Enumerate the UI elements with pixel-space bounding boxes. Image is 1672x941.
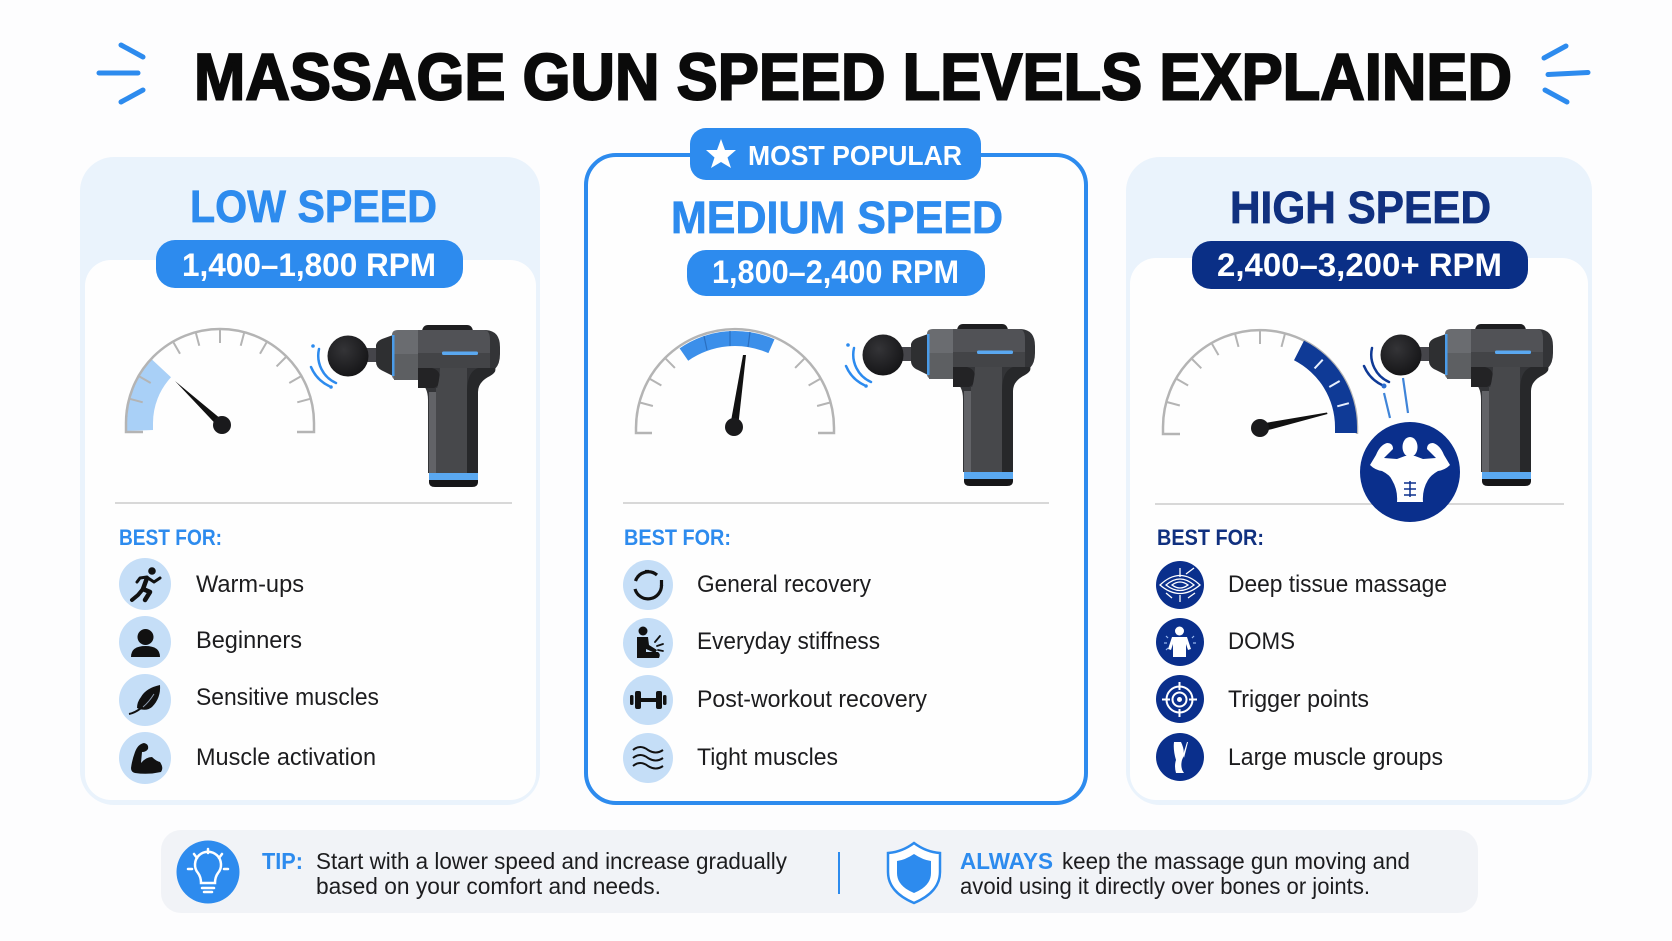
item: sensitive muscles: Sensitive muscles	[196, 684, 379, 711]
item: post-workout recovery	[623, 675, 927, 725]
rpm pill: medium: 1,800–2,400 RPM	[712, 254, 959, 290]
rpm pill: low: 1,400–1,800 RPM	[182, 247, 436, 283]
icon: muscle badge	[1360, 422, 1460, 522]
gauge: medium	[636, 329, 834, 436]
massage gun: medium	[846, 324, 1035, 486]
item: large muscle groups: Large muscle groups	[1228, 744, 1443, 771]
item: muscle activation	[119, 732, 376, 784]
label: best for medium: BEST FOR:	[624, 525, 731, 550]
label: best for high: BEST FOR:	[1157, 525, 1264, 550]
item: deep tissue massage: Deep tissue massage	[1228, 571, 1447, 598]
panel: medium speed	[586, 128, 1086, 803]
tip text	[262, 848, 787, 899]
badge: most popular: MOST POPULAR	[748, 140, 962, 171]
rpm pill: high: 2,400–3,200+ RPM	[1217, 247, 1502, 283]
heading: medium speed: MEDIUM SPEED	[671, 192, 1003, 243]
item: trigger points: Trigger points	[1228, 686, 1369, 713]
gauge: high	[1163, 330, 1357, 437]
item: beginners: Beginners	[196, 627, 302, 654]
item: doms	[1156, 618, 1295, 666]
badge: most popular	[690, 128, 981, 180]
heading: high speed: HIGH SPEED	[1230, 182, 1491, 233]
item: beginners	[119, 616, 302, 668]
title: MASSAGE GUN SPEED LEVELS EXPLAINED	[194, 40, 1512, 114]
item: general recovery	[623, 560, 871, 610]
panel: high speed	[1126, 157, 1592, 805]
arrow: impact lines	[1384, 378, 1408, 418]
label: best for low: BEST FOR:	[119, 525, 222, 550]
icon: left sparks	[99, 45, 143, 102]
rpm pill: low	[156, 240, 463, 288]
callout bar: tips	[161, 830, 1478, 913]
item: warm-ups	[119, 558, 304, 610]
item: warm-ups: Warm-ups	[196, 571, 304, 598]
item: everyday stiffness	[623, 618, 880, 668]
icon: shield	[888, 843, 940, 903]
item: deep tissue massage	[1156, 561, 1447, 609]
item: everyday stiffness: Everyday stiffness	[697, 628, 880, 655]
always text: keep the massage gun moving and	[1062, 848, 1410, 874]
item: muscle activation: Muscle activation	[196, 744, 376, 771]
item: large muscle groups	[1156, 733, 1443, 781]
tip text: TIP:	[262, 848, 303, 874]
icon: right sparks	[1544, 46, 1588, 102]
massage gun: low	[311, 325, 500, 487]
gauge: low	[126, 329, 314, 434]
rpm pill: high	[1192, 241, 1528, 289]
massage gun: high	[1364, 324, 1553, 486]
item: general recovery: General recovery	[697, 571, 871, 598]
item: tight muscles: Tight muscles	[697, 744, 838, 771]
tip text: based on your comfort and needs.	[316, 873, 661, 899]
always text	[960, 848, 1410, 899]
item: sensitive muscles	[119, 674, 379, 726]
rpm pill: medium	[687, 250, 985, 296]
icon: light bulb	[176, 840, 240, 904]
always text: avoid using it directly over bones or joints.	[960, 873, 1370, 899]
heading: low speed: LOW SPEED	[190, 181, 437, 232]
item: doms: DOMS	[1228, 628, 1295, 655]
tip text: Start with a lower speed and increase gradually	[316, 848, 787, 874]
item: post-workout recovery: Post-workout recovery	[697, 686, 927, 713]
item: trigger points	[1156, 675, 1369, 723]
always text: ALWAYS	[960, 848, 1053, 874]
item: tight muscles	[623, 733, 838, 783]
panel: low speed	[80, 157, 540, 805]
